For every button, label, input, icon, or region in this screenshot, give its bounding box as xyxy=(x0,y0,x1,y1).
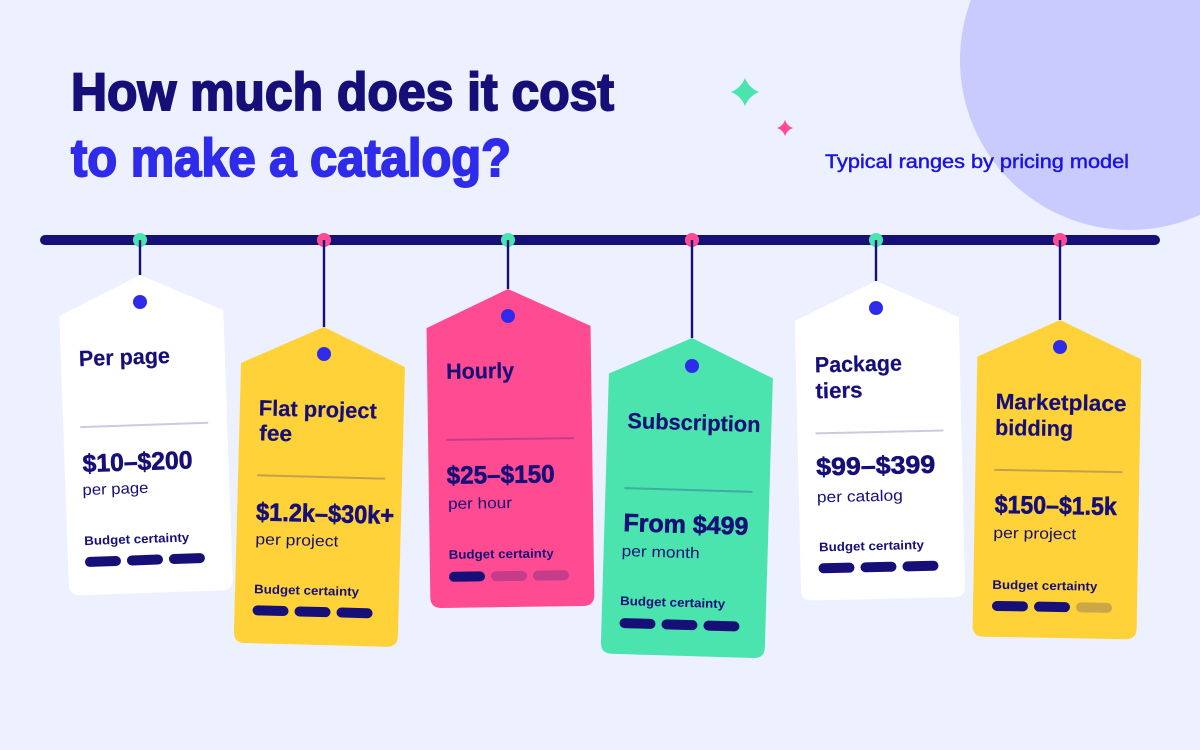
tag card: flat project fee: $1.2k–$30k+ xyxy=(256,498,394,530)
tag card: per page xyxy=(58,272,233,596)
tag: flat project fee xyxy=(234,233,406,647)
hanging rail xyxy=(40,235,1160,245)
tag: marketplace bidding xyxy=(972,233,1142,639)
tag card: package tiers: tiers xyxy=(815,377,863,403)
tag card: subscription: From $499 xyxy=(623,509,749,541)
tag hole: flat project fee xyxy=(317,347,331,361)
tag hole: per page xyxy=(133,295,147,309)
pin and string: package tiers xyxy=(869,233,883,281)
tag card: marketplace bidding: bidding xyxy=(995,415,1073,441)
tag card: subscription xyxy=(601,336,774,658)
tag card: flat project fee: Budget certainty xyxy=(254,582,359,599)
tag card: flat project fee: Flat project xyxy=(259,395,378,423)
tag: subscription xyxy=(601,233,774,658)
title: How much does it cost xyxy=(71,63,614,122)
tag hole: subscription xyxy=(685,359,699,373)
tag: package tiers xyxy=(794,233,965,601)
tag card: marketplace bidding xyxy=(972,319,1142,639)
tag card: hourly: per hour xyxy=(448,495,512,513)
icon: pink sparkle xyxy=(777,120,793,136)
tag card: package tiers: Budget certainty xyxy=(819,538,924,554)
tag hole: marketplace bidding xyxy=(1053,340,1067,354)
pin and string: per page xyxy=(133,233,147,275)
tag card: per page: Budget certainty xyxy=(84,530,189,548)
tag card: subscription: Budget certainty xyxy=(620,594,725,611)
tag card: subscription: Subscription xyxy=(627,408,761,437)
tag card: marketplace bidding: per project xyxy=(993,525,1077,543)
title xyxy=(71,63,614,188)
pin and string: marketplace bidding xyxy=(1053,233,1067,320)
tag card: package tiers xyxy=(794,279,965,601)
tag card: marketplace bidding: Budget certainty xyxy=(992,578,1098,594)
tag card: flat project fee: fee xyxy=(259,420,293,446)
tag card: flat project fee: per project xyxy=(255,531,339,550)
tag card: package tiers: Package xyxy=(815,350,902,377)
tag card: per page: Per page xyxy=(78,343,170,371)
tag card: marketplace bidding: $150–$1.5k xyxy=(995,491,1117,521)
tag hole: hourly xyxy=(501,309,515,323)
tag card: subscription: per month xyxy=(621,543,700,562)
pin and string: flat project fee xyxy=(317,233,331,327)
tag card: hourly: Hourly xyxy=(446,358,515,384)
tag card: hourly: Budget certainty xyxy=(449,546,554,562)
tag card: hourly xyxy=(426,288,594,608)
pin and string: hourly xyxy=(501,233,515,289)
tag hole: package tiers xyxy=(869,301,883,315)
icon: green sparkle xyxy=(731,78,759,106)
tag card: hourly: $25–$150 xyxy=(446,460,555,490)
tag card: per page: per page xyxy=(82,480,149,499)
tag card: per page: $10–$200 xyxy=(82,446,193,478)
tag card: marketplace bidding: Marketplace xyxy=(995,389,1127,416)
tag: hourly xyxy=(426,233,594,608)
tag card: package tiers: per catalog xyxy=(817,487,903,506)
decorative circle xyxy=(960,0,1200,230)
pin and string: subscription xyxy=(685,233,699,338)
tag card: package tiers: $99–$399 xyxy=(816,451,936,481)
title: to make a catalog? xyxy=(71,129,511,188)
tag card: flat project fee xyxy=(234,325,406,647)
tag: per page xyxy=(58,233,233,596)
subtitle: Typical ranges by pricing model xyxy=(825,152,1129,173)
